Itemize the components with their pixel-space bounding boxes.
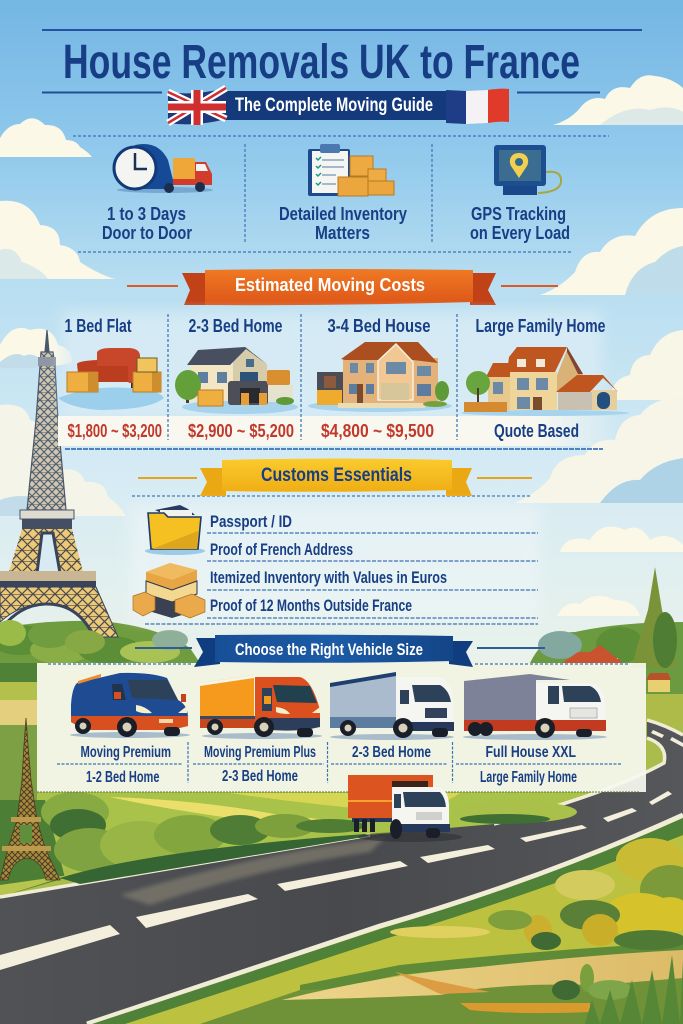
feature label: days	[102, 204, 192, 243]
cloud: right large	[514, 398, 683, 503]
vehicle sizes	[86, 768, 577, 786]
vehicle sizes: Large Family Home	[480, 769, 577, 786]
panel: moving costs	[58, 312, 629, 449]
feature label: GPS: on Every Load	[470, 223, 570, 243]
checklist rows: Itemized Inventory with Values in Euros	[210, 569, 447, 587]
cloud: right upper	[610, 330, 683, 400]
icon: truck on the road	[348, 775, 462, 842]
hills: right tree line	[530, 622, 683, 700]
icon: blue van	[70, 673, 190, 738]
house: small yellow	[646, 673, 671, 692]
icon: French flag	[446, 89, 509, 124]
feature label: inventory: Detailed Inventory	[279, 204, 407, 224]
column titles: 2-3 Bed Home	[188, 316, 282, 336]
panel: vehicle sizes	[37, 663, 646, 792]
icon: sofa and boxes	[58, 348, 164, 410]
banner text: Customs Essentials	[261, 465, 412, 486]
trees: far right	[632, 567, 677, 668]
house: red roof in distance	[562, 645, 623, 666]
column titles	[64, 316, 606, 336]
road: worn streaks	[120, 838, 385, 905]
hills: right meadow	[646, 694, 683, 726]
cloud: behind tower lower	[0, 405, 126, 516]
icon: grey box truck	[463, 674, 607, 740]
column titles: 1 Bed Flat	[64, 316, 132, 336]
landscape: fields and hills	[0, 621, 683, 1024]
icon: clock and truck	[114, 144, 213, 193]
road: centre dashes	[0, 730, 683, 970]
checklist rows: Passport / ID	[210, 513, 292, 531]
icon: Eiffel Tower	[0, 330, 118, 637]
features row	[73, 136, 609, 252]
grass tufts: bottom right	[585, 955, 683, 1024]
feature label: GPS	[470, 204, 570, 243]
clouds	[0, 75, 683, 616]
icon: small Eiffel Tower	[0, 718, 60, 880]
icon: 2-3 bed home	[175, 347, 298, 414]
subtitle text: The Complete Moving Guide	[235, 95, 433, 116]
cloud: behind tower upper	[0, 328, 72, 368]
prices: $2,900 ~ $5,200	[188, 421, 294, 441]
cloud: upper left	[0, 118, 92, 157]
road: lower edge line	[87, 815, 683, 1024]
icon: clipboard and boxes	[308, 144, 394, 196]
bushes: in front of Eiffel Tower	[0, 620, 105, 654]
vehicle names	[80, 744, 576, 761]
hills: left tree line	[0, 621, 200, 664]
icon: large family home	[461, 347, 629, 416]
icon: stacked boxes	[133, 563, 205, 618]
checklist rows: Proof of 12 Months Outside France	[210, 597, 412, 615]
vehicle names: Full House XXL	[486, 744, 576, 761]
prices: $1,800 ~ $3,200	[68, 421, 162, 441]
subtitle ribbon	[42, 88, 600, 125]
vehicle sizes: 2-3 Bed Home	[222, 768, 298, 785]
land below road	[92, 818, 683, 1024]
cloud: right small	[560, 527, 683, 552]
field base	[0, 663, 683, 1024]
feature label: inventory: Matters	[315, 223, 370, 243]
grass strip by road	[0, 875, 70, 897]
checklist rows	[145, 513, 538, 624]
bushes: lower right	[390, 838, 683, 950]
icon: orange truck	[200, 675, 322, 739]
checklist rows: Proof of French Address	[210, 541, 353, 559]
prices: $4,800 ~ $9,500	[321, 421, 434, 441]
banner text: Choose the Right Vehicle Size	[235, 640, 423, 659]
hills: central field	[37, 792, 646, 880]
hills: left yellow band	[0, 682, 37, 800]
icon: GPS monitor	[494, 145, 561, 195]
icon: 3-4 bed house	[308, 342, 452, 412]
feature label: days: 1 to 3 Days	[107, 204, 186, 224]
column titles: Large Family Home	[476, 316, 606, 336]
wheat field: orange furrows	[395, 972, 590, 1013]
vehicle names: Moving Premium Plus	[204, 744, 316, 761]
icon: folder	[145, 505, 205, 555]
hedge above wheat	[300, 942, 683, 995]
prices: Quote Based	[494, 421, 579, 441]
vehicle names: 2-3 Bed Home	[352, 744, 431, 761]
feature label: days: Door to Door	[102, 223, 192, 243]
column titles: 3-4 Bed House	[328, 316, 430, 336]
cloud: mid right	[540, 208, 683, 295]
table rules	[57, 742, 621, 783]
banner: Customs Essentials	[132, 458, 532, 496]
background: sky	[0, 0, 683, 680]
banner: Estimated Moving Costs	[127, 269, 558, 305]
icon: white truck with grey box	[330, 672, 454, 740]
cloud: top right	[553, 75, 683, 125]
hills: left meadow strip	[0, 663, 37, 682]
feature label: inventory	[279, 204, 407, 243]
cloud: mid left	[0, 201, 115, 279]
prices	[68, 421, 579, 441]
header rule	[42, 29, 642, 31]
feature label: GPS: GPS Tracking	[471, 204, 566, 224]
road: upper edge line	[0, 720, 683, 897]
icon: UK flag	[168, 88, 226, 125]
banner: Choose the Right Vehicle Size	[135, 635, 545, 667]
banner text: Estimated Moving Costs	[235, 275, 425, 295]
road verge: green strip	[92, 818, 683, 1024]
trees and shrubs at field edge	[552, 964, 632, 1000]
cloud: right low	[557, 596, 640, 616]
bushes: beside road left	[41, 792, 577, 884]
panel: customs essentials	[130, 505, 540, 624]
vehicle sizes: 1-2 Bed Home	[86, 769, 160, 786]
vehicle names: Moving Premium	[80, 744, 171, 761]
road	[0, 720, 683, 1024]
hills: lower-left grass	[0, 800, 65, 897]
meadow	[200, 975, 683, 1024]
wheat field	[282, 950, 683, 1000]
